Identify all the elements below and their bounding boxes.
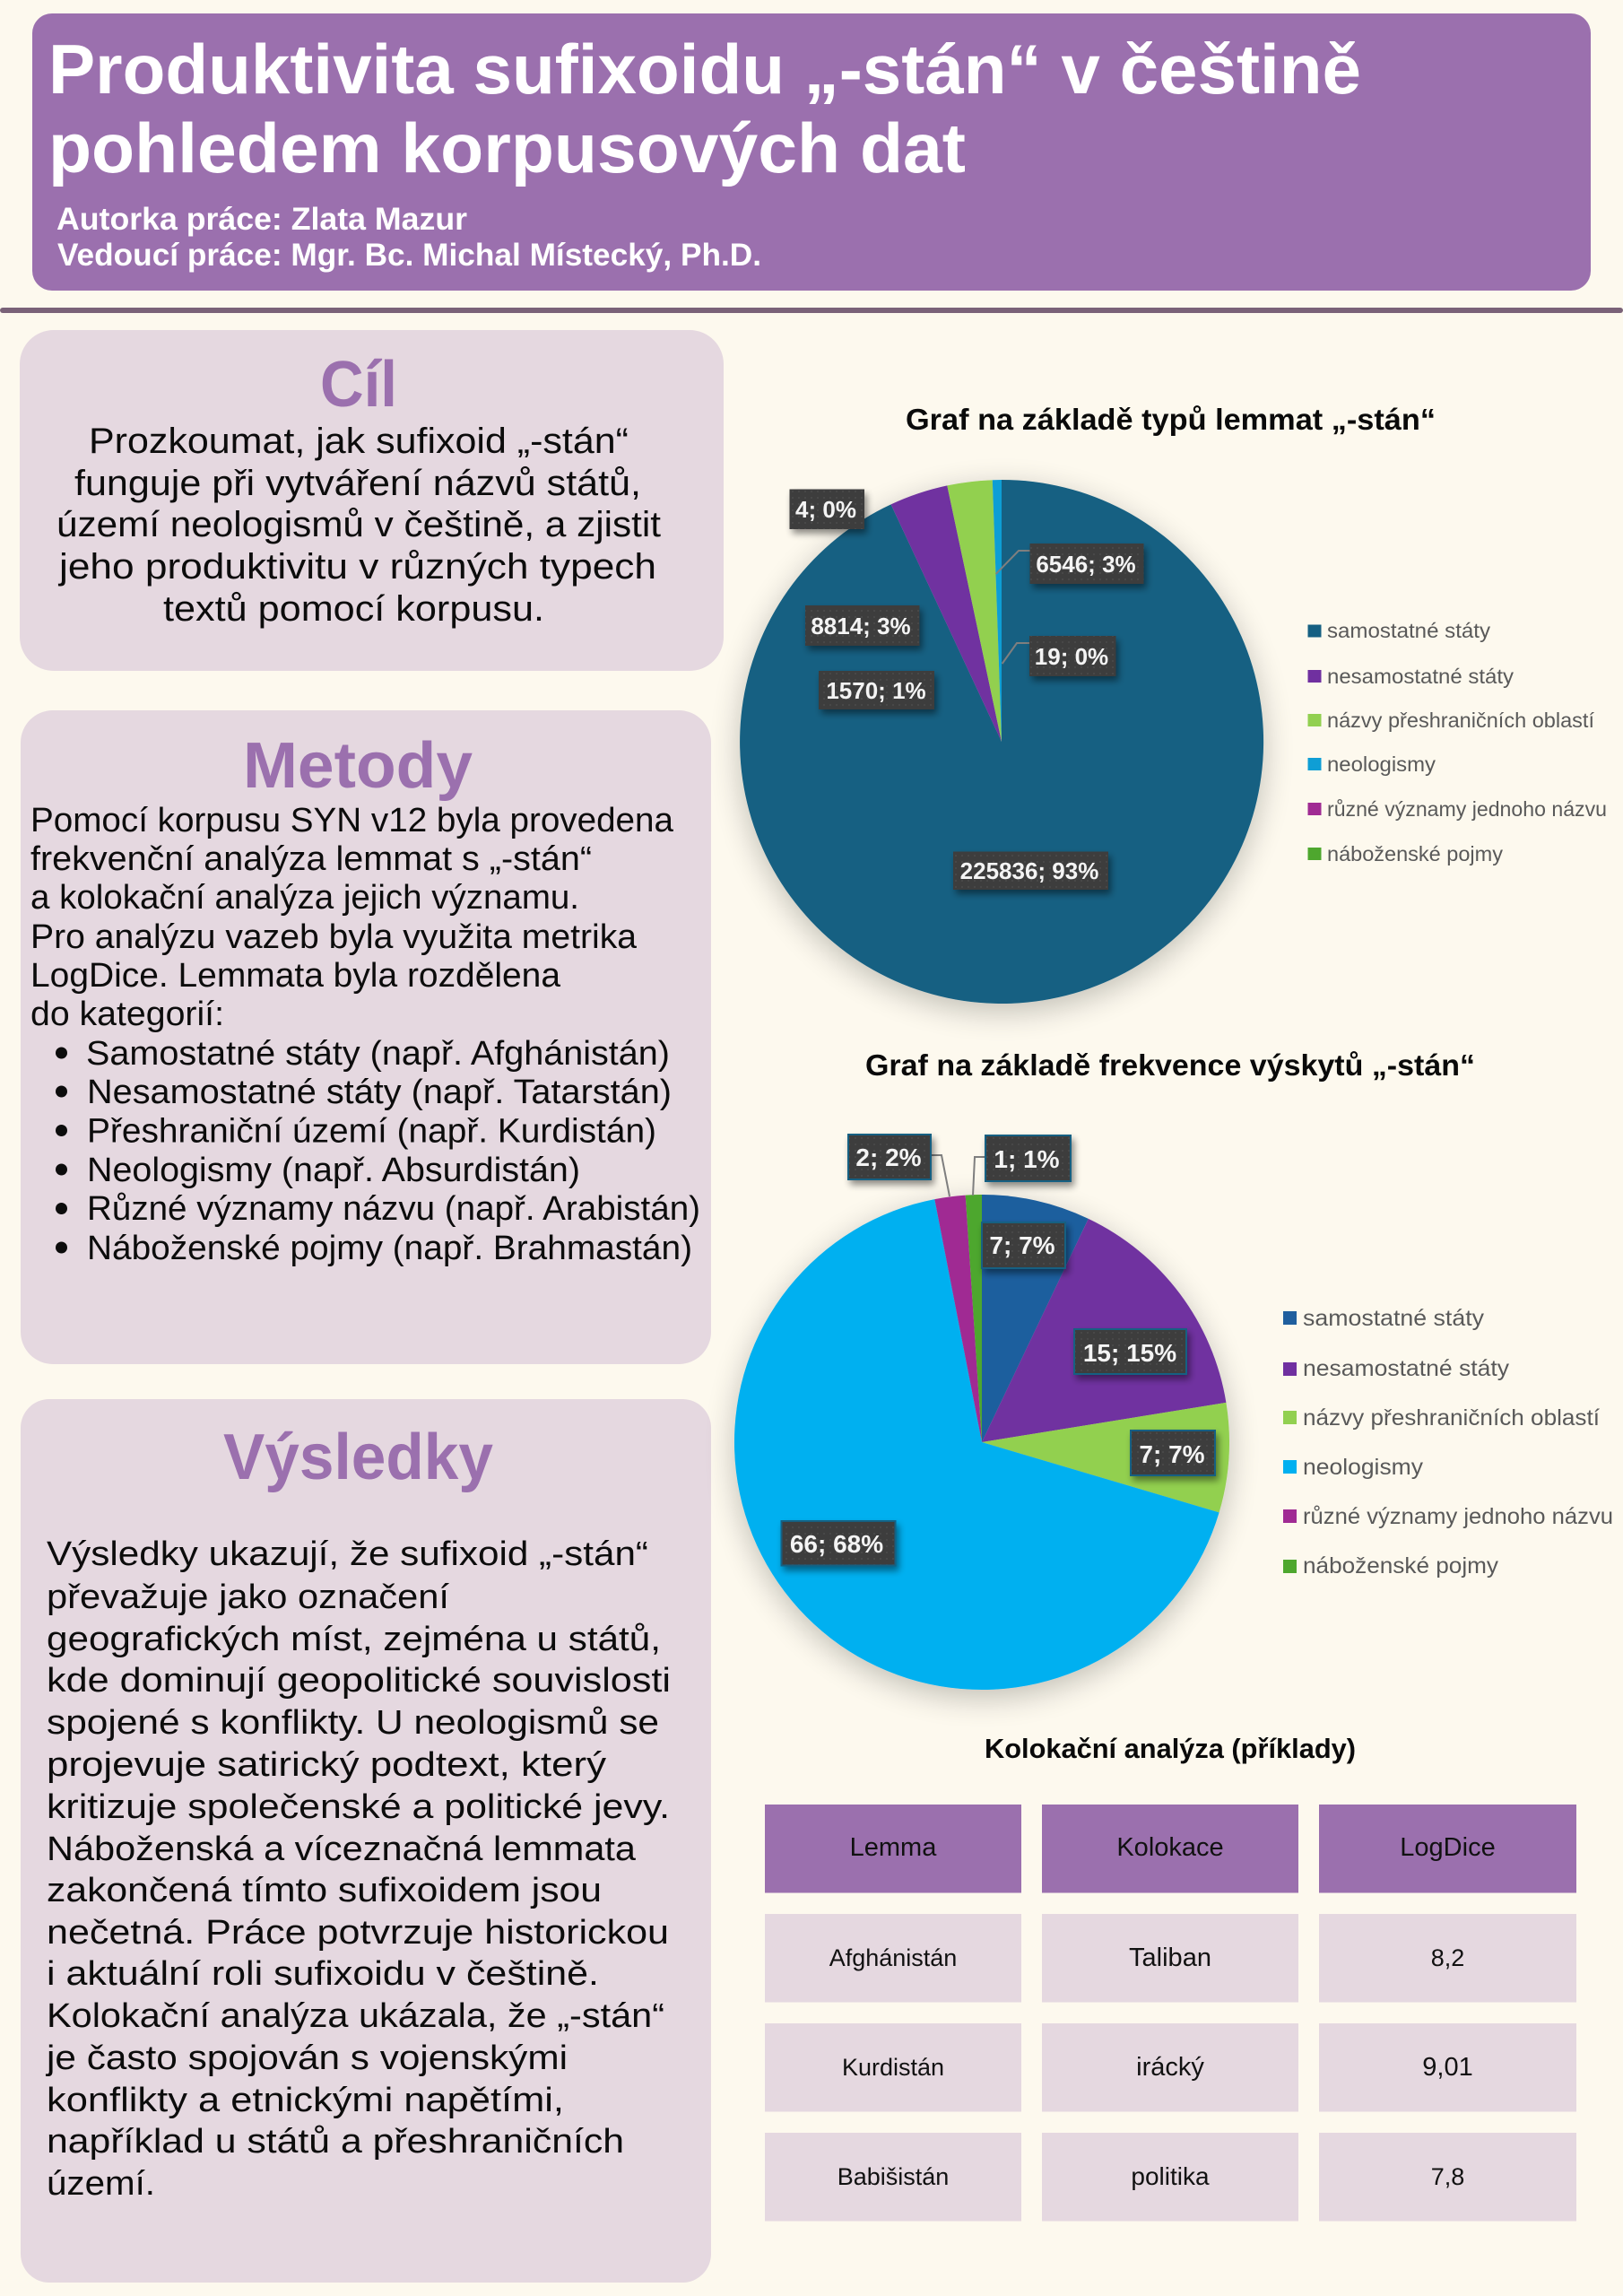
row: Kurdistán: Kurdistán [842, 2054, 944, 2081]
text: results: Výsledky ukazují, že sufixoid „-stán“ [47, 1535, 648, 1573]
data labels: 2; 2% [855, 1144, 922, 1171]
legend: náboženské pojmy [1327, 842, 1503, 865]
authors [56, 202, 761, 273]
legend: názvy přeshraničních oblastí [1327, 709, 1595, 732]
row: Afghánistán [765, 1914, 1576, 2002]
text: results: spojené s konflikty. U neologismů se [47, 1704, 659, 1742]
text: methods: do kategorií: [30, 996, 224, 1033]
text: goal: funguje při vytváření názvů států, [74, 464, 641, 503]
data labels: 15; 15% [1083, 1339, 1176, 1367]
title [48, 30, 1361, 187]
title: pohledem korpusových dat [48, 109, 966, 187]
legend: nesamostatné státy [1327, 665, 1515, 688]
heading: Výsledky: Výsledky [223, 1422, 493, 1493]
data labels: 19; 0% [1035, 643, 1108, 670]
data labels: 7; 7% [989, 1231, 1055, 1259]
text: results: Kolokační analýza ukázala, že „-stán“ [47, 1997, 664, 2035]
text: methods: Pro analýzu vazeb byla využita metrika [30, 918, 638, 956]
legend: různé významy jednoho názvu [1327, 797, 1607, 821]
text: methods: a kolokační analýza jejich významu. [30, 879, 579, 917]
data labels: 225836; 93% [960, 857, 1098, 884]
header banner [32, 13, 1591, 291]
text: results: je často spojován s vojenskými [46, 2039, 568, 2077]
text: methods: LogDice. Lemmata byla rozdělena [30, 957, 561, 995]
text: methods [30, 802, 674, 1033]
panel: Výsledky [21, 1399, 711, 2283]
legend [1283, 1306, 1613, 1578]
text: results: převažuje jako označení [47, 1578, 449, 1616]
legend: názvy přeshraničních oblastí [1303, 1405, 1600, 1431]
list: categories [56, 1035, 700, 1267]
text: results: i aktuální roli sufixoidu v češtině. [47, 1955, 599, 1993]
list: categories: Neologismy (např. Absurdistán) [87, 1152, 580, 1189]
list: categories: Přeshraniční území (např. Kurdistán) [87, 1112, 656, 1150]
text: goal: jeho produktivitu v různých typech [58, 547, 656, 587]
pie slices [740, 480, 1263, 1004]
text: results: zakončená tímto sufixoidem jsou [47, 1872, 602, 1909]
header row: Kolokace [1116, 1833, 1224, 1862]
row: Babišistán [765, 2133, 1576, 2221]
row: Afghánistán: Afghánistán [829, 1944, 957, 1971]
title: Produktivita sufixoidu „-stán“ v češtině [48, 30, 1361, 109]
chart title: Graf na základě frekvence výskytů „-stán“ [865, 1048, 1475, 1082]
heading: Cíl: Cíl [320, 349, 397, 421]
authors: Autorka práce: Zlata Mazur [56, 202, 467, 237]
leader lines [996, 551, 1030, 664]
legend: nesamostatné státy [1303, 1356, 1510, 1381]
text: results [46, 1535, 671, 2203]
row: Kurdistán [765, 2023, 1576, 2111]
row: Kurdistán: 9,01 [1422, 2053, 1473, 2082]
chart title: Graf na základě typů lemmat „-stán“ [906, 403, 1436, 436]
header row: Lemma [850, 1833, 937, 1862]
legend: samostatné státy [1327, 619, 1491, 642]
legend: neologismy [1303, 1455, 1424, 1480]
text: results: konflikty a etnickými napětími, [47, 2082, 564, 2119]
legend [1307, 619, 1607, 865]
list: categories: Různé významy názvu (např. Arabistán) [87, 1190, 700, 1228]
text: results: například u států a přeshraničních [47, 2123, 624, 2161]
text: goal: textů pomocí korpusu. [163, 589, 544, 629]
legend: náboženské pojmy [1303, 1553, 1499, 1578]
legend: samostatné státy [1303, 1306, 1485, 1331]
data labels: 66; 68% [790, 1530, 883, 1558]
authors: Vedoucí práce: Mgr. Bc. Michal Místecký, Ph.D. [57, 238, 761, 273]
table: collocation analysis [765, 1733, 1576, 2221]
row: Babišistán: 7,8 [1431, 2163, 1464, 2190]
data labels: 7; 7% [1139, 1440, 1205, 1468]
list: categories: Samostatné státy (např. Afghánistán) [86, 1035, 670, 1073]
row: Babišistán: Babišistán [838, 2163, 949, 2190]
text: results: projevuje satirický podtext, který [47, 1746, 606, 1784]
text: results: Náboženská a víceznačná lemmata [47, 1831, 637, 1868]
data labels: 8814; 3% [811, 613, 911, 639]
header row [765, 1805, 1576, 1892]
text: results: kde dominují geopolitické souvislosti [47, 1662, 671, 1700]
data labels: 6546; 3% [1036, 551, 1136, 578]
heading: Metody: Metody [243, 730, 473, 802]
data labels: 4; 0% [795, 496, 856, 523]
text: goal: Prozkoumat, jak sufixoid „-stán“ [89, 422, 629, 461]
data labels: 1570; 1% [826, 677, 926, 704]
leader lines [931, 1155, 985, 1196]
table title: Kolokační analýza (příklady) [985, 1733, 1356, 1764]
text: results: geografických míst, zejména u států, [47, 1621, 661, 1658]
legend: neologismy [1327, 752, 1436, 776]
row: Kurdistán: irácký [1136, 2053, 1204, 2082]
row: Afghánistán: 8,2 [1431, 1944, 1464, 1971]
list: categories: Nesamostatné státy (např. Tatarstán) [87, 1074, 672, 1111]
text: methods: frekvenční analýza lemmat s „-stán“ [30, 840, 592, 878]
text: methods: Pomocí korpusu SYN v12 byla provedena [30, 802, 674, 839]
text: goal: území neologismů v češtině, a zjistit [56, 505, 661, 544]
data labels: 1; 1% [994, 1145, 1060, 1173]
row: Babišistán: politika [1131, 2162, 1210, 2190]
text: results: území. [47, 2165, 155, 2203]
pie slices [734, 1195, 1229, 1690]
chart: pie by lemma types [740, 403, 1607, 1004]
panel: Metody [21, 710, 711, 1364]
row: Afghánistán: Taliban [1129, 1944, 1211, 1972]
chart: pie by frequency [734, 1048, 1613, 1690]
text: results: nečetná. Práce potvrzuje historickou [47, 1914, 669, 1952]
header row: LogDice [1400, 1833, 1496, 1862]
legend: různé významy jednoho názvu [1303, 1504, 1613, 1529]
list: categories: Náboženské pojmy (např. Brahmastán) [87, 1230, 692, 1267]
data labels [789, 490, 1144, 890]
panel: Cíl [20, 330, 724, 671]
data labels [782, 1135, 1215, 1566]
text: results: kritizuje společenské a politické jevy. [47, 1788, 670, 1826]
text: goal [56, 422, 661, 629]
